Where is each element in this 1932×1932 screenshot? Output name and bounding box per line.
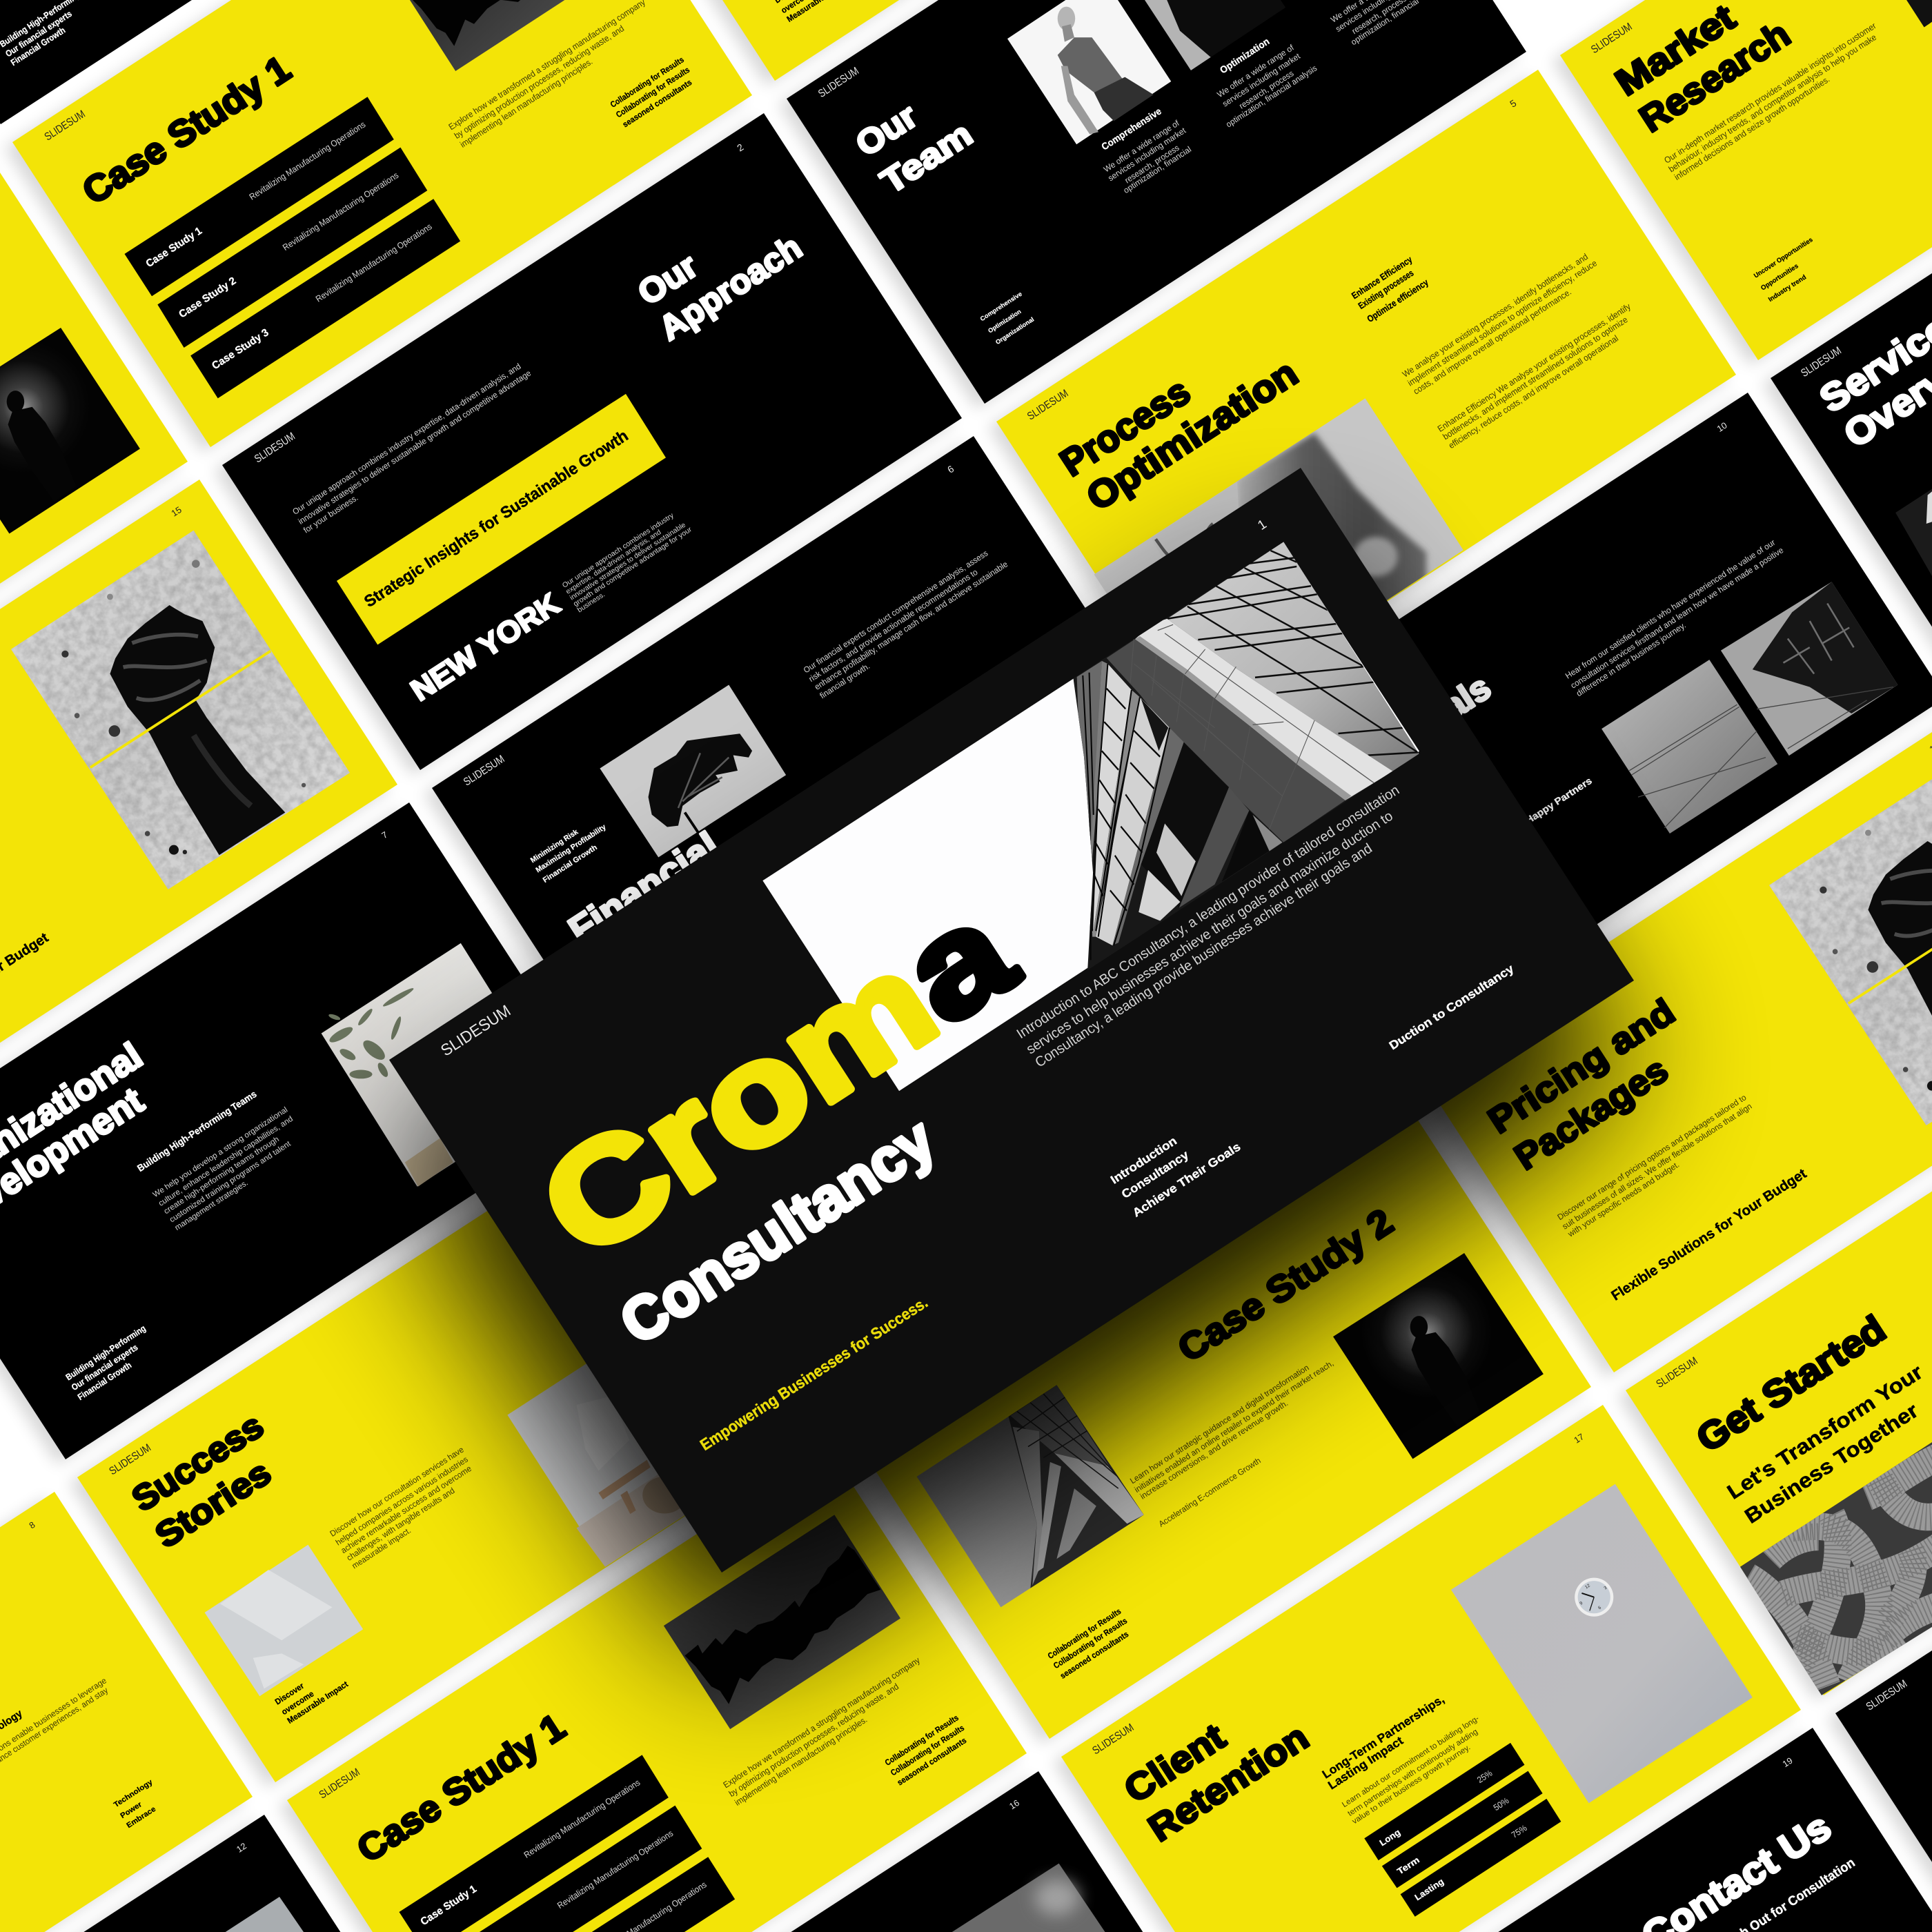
image: wall clock [1451, 1484, 1753, 1803]
body text 2: efficiency, reduce costs, and improve overall operational [1446, 333, 1620, 451]
slide: case study 1, bottom [287, 1448, 1027, 1932]
case study bar 2: Revitalizing Manufacturing Operations [281, 170, 400, 253]
tagline: Flexible Solutions for Your Budget [1609, 1166, 1809, 1304]
slide number: 5 [1508, 97, 1519, 110]
subheading: Lasting Impact [1325, 1733, 1406, 1792]
logo: SLIDESUM [1655, 1355, 1700, 1390]
body text 2: Enhance Efficiency We analyse your existing processes, identify [1435, 301, 1633, 434]
image: dark architecture [1895, 480, 1932, 585]
key points: Collaborating for Results [1052, 1616, 1129, 1670]
image: team member [1007, 0, 1171, 144]
logo and key points: Maximizing Profitability [534, 823, 608, 874]
key points: seasoned consultants [1058, 1629, 1130, 1681]
tagline: Empowering Businesses for Success. [697, 1293, 931, 1454]
logo: SLIDESUM [1589, 21, 1635, 56]
body text: create high-performing teams through [163, 1135, 281, 1216]
logo and key points: Financial Growth [542, 843, 599, 885]
body text: helped companies across various industries [334, 1455, 470, 1548]
body text 1: implement streamlined solutions to optimize efficiency, reduce [1406, 257, 1599, 388]
key points: Achieve Their Goals [1130, 1139, 1243, 1220]
body text: behaviour, industry trends, and competitor analysis to help you make [1666, 32, 1878, 175]
body text: challenges, with tangible results and [345, 1486, 456, 1563]
image: wall clock: 12 [1584, 1583, 1591, 1590]
image: white sky [762, 542, 1419, 1091]
intro paragraph: services to help businesses achieve their goals and maximize duction to [1024, 809, 1396, 1057]
subheading: Long-Term Partnerships, [1319, 1692, 1447, 1781]
body text: We help you develop a strong organizational [152, 1106, 289, 1199]
key points: Opportunities [1759, 262, 1800, 292]
slide number: 19 [1781, 1755, 1795, 1769]
team column: optimization: optimization, financial analysis [1224, 63, 1319, 129]
slide: client retention [1061, 1405, 1801, 1932]
heading: Packages [1508, 1049, 1675, 1178]
key points: Technology [112, 1778, 154, 1809]
slide number: 8 [27, 1519, 37, 1530]
slide: service overview [1771, 26, 1932, 683]
key points: Collaborating for Results [609, 55, 686, 110]
key points: Discover [273, 1681, 306, 1706]
team column: optimization: services including market [1221, 51, 1302, 109]
key points: overcome [279, 1688, 316, 1717]
slide: black, bottom right [1835, 1361, 1932, 1932]
body text: Discover how our consultation services have [328, 1445, 466, 1539]
logo and key points [462, 753, 726, 952]
case study bar 2 [157, 148, 427, 348]
body text: Learn about our commitment to building long- [1341, 1714, 1481, 1809]
slide: pricing and packages [1416, 716, 1932, 1372]
small key points: Comprehensive [979, 290, 1023, 322]
yellow banner [337, 394, 666, 644]
bar: long 25% [1364, 1743, 1524, 1860]
body text: value to their business growth journey. [1351, 1743, 1472, 1826]
slide: our team [787, 0, 1526, 404]
key points: Our financial experts [70, 1342, 139, 1392]
heading: Case Study 1 [76, 48, 298, 213]
image: plant and book [322, 943, 557, 1187]
title: Croma: Croma [515, 871, 1039, 1288]
case study bar 2 [432, 1806, 702, 1932]
bar: term 50%: Term [1395, 1855, 1421, 1877]
slide: financial [432, 436, 1172, 1093]
body text: term partnerships with continuously adding [1346, 1728, 1479, 1818]
key points: seasoned consultants [896, 1735, 968, 1787]
logo: SLIDESUM [253, 431, 297, 465]
body text: initiatives enabled an online retailer to expand their market reach, [1133, 1358, 1335, 1495]
heading: Stories [148, 1452, 278, 1555]
body text: measurable impact. [350, 1526, 413, 1570]
body text: achieve remarkable success and overcome [339, 1463, 473, 1555]
slide: white slide, top right [1350, 0, 1932, 37]
heading: Success [125, 1406, 270, 1519]
body text: difference in their business journey. [1575, 620, 1688, 698]
heading: Case Study 1 [351, 1706, 573, 1871]
small body text: Our unique approach combines industry [561, 511, 676, 590]
slide: testimonials [1206, 393, 1932, 1049]
logo and key points: Financial [562, 825, 726, 952]
body text: by optimizing production processes, reducing waste, and [453, 23, 626, 141]
key point: Happy Partners [1523, 775, 1594, 826]
body text: with your specific needs and budget. [1566, 1160, 1681, 1239]
bar: term 50% [1382, 1771, 1543, 1888]
body text: Building High-Performing Teams [135, 1088, 259, 1174]
body text: implementing lean manufacturing principles. [733, 1714, 869, 1808]
slide: white slide, left edge [0, 1169, 43, 1826]
case study bar 3 [190, 199, 460, 398]
team column: optimization: research, process [1237, 68, 1295, 111]
image: window light [205, 1545, 363, 1696]
image: interior with bench [507, 1273, 817, 1567]
body text 1: costs, and improve overall operational performance. [1411, 286, 1573, 397]
body text: consultation services firsthand and learn how we have made a positive [1569, 545, 1785, 691]
key points: Collaborating for Results [889, 1723, 966, 1777]
slide number: 15 [169, 504, 184, 519]
bar: term 50%: 50% [1491, 1795, 1510, 1813]
logo: SLIDESUM [1025, 388, 1070, 422]
body text: customized training programs and talent [168, 1139, 293, 1224]
body text: financial growth. [818, 661, 871, 700]
team column: comprehensive: Comprehensive [1099, 106, 1163, 152]
slide: number 16 [497, 1771, 1236, 1932]
key points: Consultancy [1119, 1147, 1191, 1201]
case study bar 2: Case Study 2 [177, 275, 238, 320]
subtitle: Consultancy: Consultancy [608, 1105, 946, 1357]
body text: innovative strategies to deliver sustainable growth and competitive advantage [297, 368, 533, 526]
slide: technology, number 8 [0, 1492, 253, 1932]
body text: increase conversions, and drive revenue growth. [1138, 1398, 1290, 1501]
heading [125, 1406, 278, 1555]
key points [1753, 236, 1814, 304]
image: cloudy sky [952, 1864, 1105, 1932]
slide: pricing copy with fist photo, left [0, 480, 397, 1136]
key points: Embrace [125, 1805, 157, 1830]
slide: get started [1626, 1038, 1932, 1695]
slide: organizational development [0, 802, 607, 1459]
team column: comprehensive [1099, 106, 1193, 195]
image: gray photo [226, 1897, 304, 1932]
key points: Collaborating for Results [614, 65, 691, 119]
key points [63, 1323, 148, 1402]
body text: Our unique approach combines industry expertise, data-driven analysis, and [290, 362, 522, 517]
heading: Approach [652, 228, 809, 348]
slide: case study 2 [851, 1082, 1591, 1739]
heading: Process [1052, 369, 1198, 484]
case study bar 1 [124, 97, 394, 296]
bar: lasting 75%: Lasting [1412, 1876, 1446, 1902]
image: wall clock: 6 [1597, 1605, 1602, 1610]
case study bar 1 [399, 1755, 669, 1932]
image: dark forest lake [664, 1515, 900, 1729]
small body text: business. [576, 591, 607, 614]
body text [802, 463, 1009, 700]
body text 2: bottlenecks, and implement streamlined solutions to optimize [1441, 314, 1630, 442]
small body text: growth and competitive advantage for your [572, 526, 693, 608]
image: tower from below [917, 1385, 1144, 1607]
yellow banner: Strategic Insights for Sustainable Growth [361, 426, 631, 611]
image: raised fist [1769, 767, 1932, 1125]
slide number: 16 [1007, 1797, 1021, 1811]
small body text: innovative strategies to deliver sustainable [569, 521, 687, 602]
body text: Explore how we transformed a struggling manufacturing company [721, 1655, 922, 1790]
heading: Client [1117, 1716, 1232, 1811]
heading [849, 97, 979, 201]
bar: long 25%: 25% [1475, 1768, 1494, 1785]
logo: SLIDESUM [108, 1442, 153, 1477]
slide number: 12 [235, 1840, 248, 1855]
body text: enhance profitability, manage cash flow, and achieve sustainable [813, 559, 1009, 692]
body text: for your business. [302, 493, 359, 535]
body text: culture, enhance leadership capabilities, and [157, 1115, 295, 1208]
text: slide key points: Financial Growth [9, 25, 67, 68]
slide: success stories [77, 1125, 817, 1782]
small key points: Organizational [994, 316, 1035, 346]
slide: case study 1, top [12, 0, 752, 447]
slide: number 12 [0, 1815, 462, 1932]
team column: comprehensive: We offer a wide range of [1102, 118, 1181, 175]
team column: comprehensive: optimization, financial [1122, 144, 1193, 195]
logo: SLIDESUM [43, 108, 88, 143]
heading: Retention [1141, 1717, 1316, 1850]
key points: Financial Growth [76, 1360, 133, 1402]
slide number: 17 [1572, 1431, 1586, 1446]
heading: new york: NEW YORK [405, 587, 566, 708]
bar: lasting 75% [1401, 1799, 1561, 1917]
body text: risk factors, and provide actionable recommendations to [807, 567, 980, 684]
case study bar 1: Revitalizing Manufacturing Operations [247, 119, 367, 202]
logo: SLIDESUM [1799, 345, 1844, 379]
image: bridge perspective [1601, 660, 1777, 834]
body text: implementing lean manufacturing principles. [458, 56, 594, 150]
body text: Our financial experts conduct comprehensive analysis, assess [802, 549, 989, 675]
case study bar 3: Case Study 3 [210, 326, 271, 372]
heading: Optimization [1079, 351, 1305, 519]
body text: by optimizing production processes, reducing waste, and [727, 1681, 900, 1799]
logo: SLIDESUM [1864, 1678, 1909, 1713]
heading: Our [849, 97, 924, 164]
case study bar 1: Case Study 1 [144, 225, 204, 270]
body text [135, 1088, 295, 1232]
heading: Case Study 2 [1171, 1201, 1400, 1370]
key points: Collaborating for Results [883, 1713, 960, 1768]
heading: Get Started [1689, 1307, 1893, 1460]
key points: Collaborating for Results [1046, 1606, 1123, 1661]
team column: optimization [1215, 35, 1319, 129]
key points: Enhance Efficiency [1350, 254, 1414, 301]
image: dark photo corner [1906, 0, 1932, 28]
slide: our approach [222, 113, 962, 770]
team column: optimization: Optimization [1218, 35, 1272, 76]
intro paragraph: Consultancy, a leading provide businesses achieve their goals and [1033, 841, 1375, 1071]
image: steel structure [1721, 582, 1897, 756]
slide number: 2 [735, 141, 746, 154]
body text: informed decisions and seize growth opportunities. [1673, 74, 1831, 182]
slide: market research [1560, 0, 1932, 360]
case study bar 1: Case Study 1 [418, 1883, 479, 1928]
key points: Building High-Performing [63, 1323, 148, 1382]
subheading: Business Together [1741, 1399, 1922, 1528]
case study bar 2: Revitalizing Manufacturing Operations [555, 1828, 675, 1911]
body text: Our in-depth market research provides valuable insights into customer [1662, 20, 1878, 166]
slide: success stories copy, top [577, 0, 1317, 81]
key points: Measurable Impact [286, 1679, 350, 1726]
case study bar 3: Revitalizing Manufacturing Operations [314, 221, 434, 304]
image: wall clock: 3 [1603, 1585, 1608, 1591]
slide number: 7 [379, 829, 389, 840]
body text: Hear from our satisfied clients who have experienced the value of our [1564, 538, 1777, 681]
image: dark forest lake [410, 0, 564, 71]
bar: lasting 75%: 75% [1510, 1822, 1529, 1840]
image: backlit silhouette [1333, 1253, 1544, 1459]
image: wall clock: 9 [1579, 1601, 1584, 1606]
small body text [561, 511, 693, 614]
key points: Introduction [1108, 1134, 1179, 1187]
team column: optimization: We offer a wide range of [1215, 43, 1296, 99]
key points: seasoned consultants [621, 77, 693, 129]
footer note: Duction to Consultancy [1386, 961, 1517, 1052]
image: portrait with hair [1094, 398, 1463, 600]
key points [1350, 254, 1430, 324]
logo: SLIDESUM [816, 66, 861, 100]
slide: case study 2 copy, left edge [0, 157, 188, 814]
body text: Learn how our strategic guidance and digital transformation [1128, 1363, 1311, 1486]
text: slide key points: Our financial experts [3, 8, 74, 59]
heading: Our [631, 246, 704, 313]
heading: Team [874, 115, 979, 201]
body text 1: We analyse your existing processes, identify bottlenecks, and [1400, 251, 1590, 379]
slide number: 10 [1715, 420, 1729, 434]
key points: Existing processes [1357, 268, 1415, 311]
heading: Market [1608, 0, 1743, 103]
subheading: Let's Transform Your [1724, 1361, 1927, 1504]
logo: SLIDESUM [1090, 1722, 1136, 1757]
small key points: Optimization [987, 308, 1023, 334]
heading [0, 756, 51, 1068]
body text: Discover our range of pricing options and packages tailored to [1556, 1092, 1748, 1222]
body text: Accelerating E-commerce Growth [1157, 1456, 1263, 1529]
heading: Pricing and [1481, 992, 1682, 1141]
intro paragraph: Introduction to ABC Consultancy, a leading provider of tailored consultation [1014, 782, 1402, 1042]
key points: Optimize efficiency [1365, 277, 1430, 324]
body text: management strategies. [173, 1179, 250, 1232]
body text: 6 [945, 463, 956, 475]
logo: SLIDESUM [317, 1766, 362, 1801]
key points [1108, 1134, 1243, 1220]
logo: SLIDESUM [437, 1001, 514, 1060]
key points [112, 1778, 157, 1830]
team column: comprehensive: research, process [1123, 143, 1181, 185]
logo and key points: Minimizing Risk [529, 827, 580, 865]
logo and key points: SLIDESUM [462, 753, 506, 789]
team column: comprehensive: services including market [1106, 126, 1188, 183]
image: monstera leaf [600, 684, 786, 857]
key points: Power [119, 1800, 144, 1820]
slide: organizational development copy, top left [0, 0, 542, 124]
key points: Industry trend [1767, 273, 1808, 304]
slide: contact us [1271, 1728, 1932, 1932]
heading: Testimonials [1298, 667, 1497, 816]
image: tangled rope [1740, 1416, 1932, 1695]
image: backlit silhouette [0, 328, 140, 533]
slide number: 1 [1255, 517, 1270, 533]
case study bar 1: Revitalizing Manufacturing Operations [522, 1777, 642, 1860]
small body text: expertise, data-driven analysis, and [564, 529, 663, 596]
image: second team member [1145, 0, 1285, 70]
key points: Uncover Opportunities [1753, 236, 1814, 280]
bar: long 25%: Long [1377, 1827, 1402, 1848]
main slide: Croma Consultancy cover [389, 468, 1634, 1573]
small key points [979, 290, 1035, 346]
image: glass tower [1073, 542, 1419, 970]
case study bar 3 [465, 1857, 735, 1932]
image: raised fist [11, 531, 350, 889]
body text: suit businesses of all sizes. We offer flexible solutions that align [1561, 1101, 1753, 1232]
slide: process optimization [996, 70, 1736, 602]
heading: Research [1633, 14, 1797, 140]
